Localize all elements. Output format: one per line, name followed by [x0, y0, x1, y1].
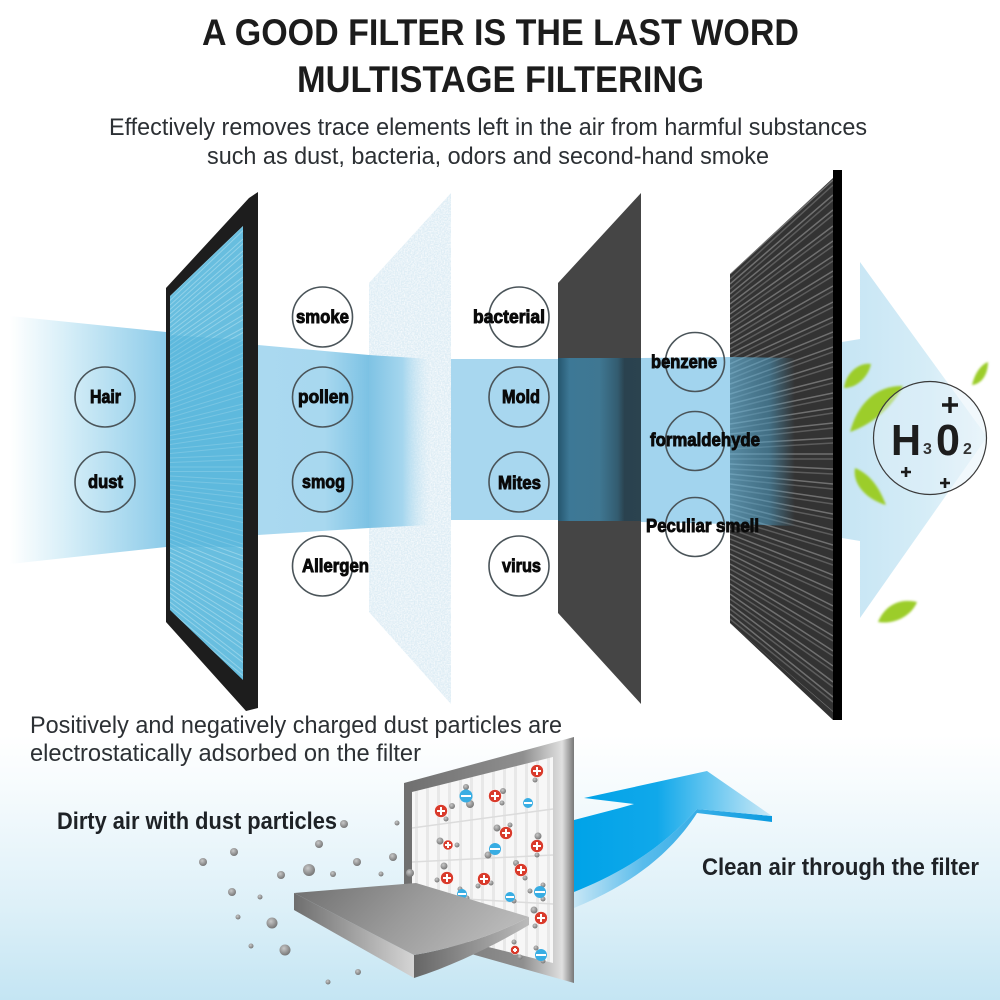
label circles: stage 3 — [473, 287, 549, 596]
leaves — [844, 362, 988, 623]
clean air output arrow — [842, 262, 987, 618]
label circles: stage 1: Hair — [90, 387, 121, 407]
label circles: stage 2: smoke — [296, 307, 349, 327]
H3O2 molecule circle — [874, 382, 986, 494]
label circles: stage 2: Allergen — [302, 556, 369, 576]
title: A GOOD FILTER IS THE LAST WORD — [202, 12, 799, 53]
filter 4: dark pleated carbon filter — [730, 170, 842, 720]
label circles: stage 4: Peculiar smell — [646, 516, 759, 536]
air beam fading across filter 4 — [730, 357, 795, 526]
label circles: stage 1 — [75, 367, 135, 512]
air beam entering first filter — [10, 316, 166, 564]
H3O2 molecule circle: 0 — [936, 416, 960, 465]
subtitle — [109, 114, 867, 170]
air beam between filter 3 and 4 — [641, 357, 730, 524]
air beam between filter 2 and 3 — [451, 359, 558, 520]
title — [202, 12, 799, 100]
clean air label: Clean air through the filter — [702, 854, 979, 881]
subtitle: such as dust, bacteria, odors and second-hand smoke — [207, 143, 769, 170]
label circles: stage 3: Mold — [502, 387, 540, 407]
negative charges — [457, 790, 547, 961]
label circles: stage 3: Mites — [498, 473, 541, 493]
electrostatic description text — [30, 712, 562, 767]
small filter with charged particles — [404, 737, 574, 983]
bottom section background — [0, 735, 1000, 1000]
label circles: stage 1: dust — [88, 472, 123, 492]
filter 1: blue pleated HEPA filter — [166, 192, 258, 711]
air beam fading into filter 2 — [369, 355, 430, 528]
label circles: stage 4: formaldehyde — [650, 430, 760, 450]
title: MULTISTAGE FILTERING — [297, 59, 704, 100]
positive charges — [434, 764, 548, 954]
label circles: stage 2 — [292, 287, 369, 596]
dust particles in the air — [199, 820, 414, 984]
air beam between filter 1 and 2 — [258, 345, 369, 535]
H3O2 molecule circle: H — [891, 416, 921, 465]
label circles: stage 4: benzene — [651, 352, 717, 372]
clean air curved blue arrow — [574, 771, 772, 908]
H3O2 molecule circle: 3 — [923, 441, 932, 458]
grey filter slab — [294, 883, 529, 978]
label circles: stage 3: virus — [502, 556, 541, 576]
electrostatic description text: electrostatically adsorbed on the filter — [30, 740, 421, 767]
electrostatic description text: Positively and negatively charged dust particles are — [30, 712, 562, 739]
label circles: stage 3: bacterial — [473, 307, 545, 327]
label circles: stage 2: pollen — [298, 387, 349, 407]
subtitle: Effectively removes trace elements left in the air from harmful substances — [109, 114, 867, 141]
H3O2 molecule circle: 2 — [963, 441, 972, 458]
filter 2: white cotton filter — [369, 193, 451, 704]
dirty air label: Dirty air with dust particles — [57, 808, 337, 835]
label circles: stage 2: smog — [302, 472, 345, 492]
label circles: stage 4 — [646, 332, 760, 556]
grey particles on filter — [434, 778, 546, 964]
filter 3: dark activated carbon filter — [558, 193, 641, 704]
